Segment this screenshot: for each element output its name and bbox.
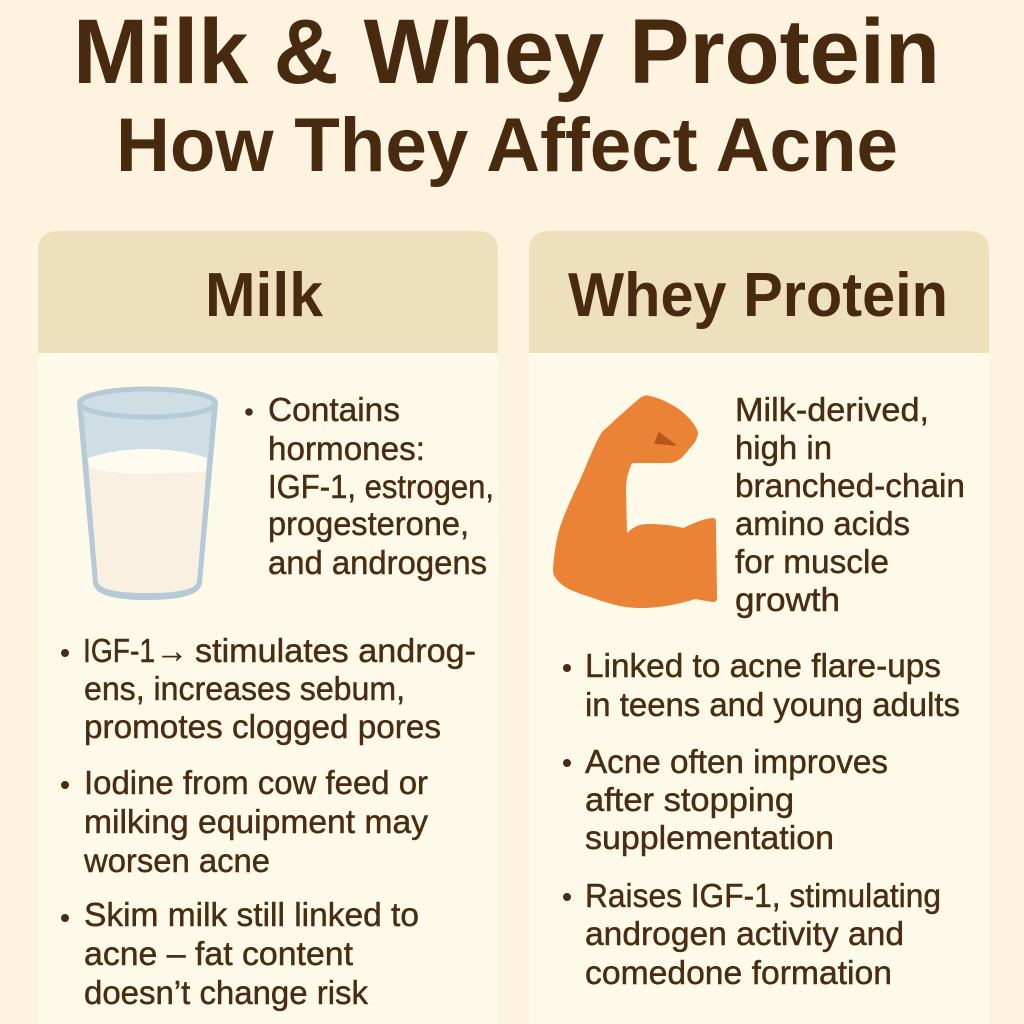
whey bullet: IGF-1: Raises IGF-1, stimulating — [585, 877, 941, 914]
milk intro bullet: hormones: hormones: — [268, 430, 425, 467]
milk bullet: skim milk: acne – fat content — [84, 935, 353, 972]
whey bullet: flare-ups: in teens and young adults — [585, 686, 960, 723]
milk intro bullet: hormones: progesterone, — [268, 505, 469, 542]
whey bullet: IGF-1 — [563, 877, 941, 991]
milk bullet: skim milk: Skim milk still linked to — [84, 896, 419, 933]
milk bullet: iodine — [61, 764, 429, 879]
milk bullet: iodine: milking equipment may — [84, 803, 429, 840]
milk bullet: IGF-1: IGF-1 — [83, 632, 155, 669]
milk header band — [38, 231, 498, 353]
whey intro text: Milk-derived, — [735, 391, 929, 428]
milk bullet: iodine: worsen acne — [83, 842, 270, 879]
panel: whey protein — [529, 231, 989, 1024]
milk bullet: iodine: Iodine from cow feed or — [84, 764, 428, 801]
title: Milk & Whey Protein — [73, 1, 940, 103]
whey intro text: branched-chain — [735, 467, 965, 504]
whey bullet: stopping supplementation — [563, 743, 888, 856]
whey bullet: IGF-1: comedone formation — [585, 954, 892, 991]
whey header band — [529, 231, 989, 353]
milk intro bullet: hormones — [245, 391, 494, 581]
whey intro text: for muscle — [735, 543, 889, 580]
milk bullet: IGF-1: stimulates androg- — [195, 632, 476, 669]
milk bullet: IGF-1 — [61, 632, 476, 745]
panel: milk — [38, 231, 498, 1024]
whey intro text: high in — [735, 429, 832, 466]
milk intro bullet: hormones: and androgens — [268, 544, 487, 581]
whey intro text — [735, 391, 965, 618]
milk bullet: skim milk: doesn’t change risk — [84, 974, 368, 1011]
whey heading: Whey Protein — [568, 261, 948, 330]
whey bullet: stopping supplementation: Acne often improves — [585, 743, 888, 780]
whey intro text: growth — [735, 581, 840, 618]
icon: flexed arm — [553, 395, 717, 608]
whey intro text: amino acids — [735, 505, 910, 542]
milk heading: Milk — [205, 261, 323, 330]
whey bullet: stopping supplementation: after stopping — [585, 781, 794, 818]
milk panel body — [38, 231, 498, 1024]
milk bullet: IGF-1: ens, increases sebum, — [84, 670, 405, 707]
milk intro bullet: hormones: IGF-1, estrogen, — [268, 468, 494, 505]
icon: glass of milk — [77, 389, 218, 600]
milk bullet: IGF-1: → — [156, 632, 188, 669]
whey bullet: stopping supplementation: supplementation — [585, 819, 834, 856]
milk bullet: IGF-1: promotes clogged pores — [84, 708, 441, 745]
subtitle: How They Affect Acne — [116, 103, 898, 188]
whey panel body — [529, 231, 989, 1024]
whey bullet: IGF-1: androgen activity and — [585, 915, 904, 952]
whey bullet: flare-ups: Linked to acne flare-ups — [585, 647, 941, 684]
milk intro bullet: hormones: Contains — [268, 391, 400, 428]
whey bullet: flare-ups — [563, 647, 960, 723]
milk bullet: skim milk — [61, 896, 419, 1011]
